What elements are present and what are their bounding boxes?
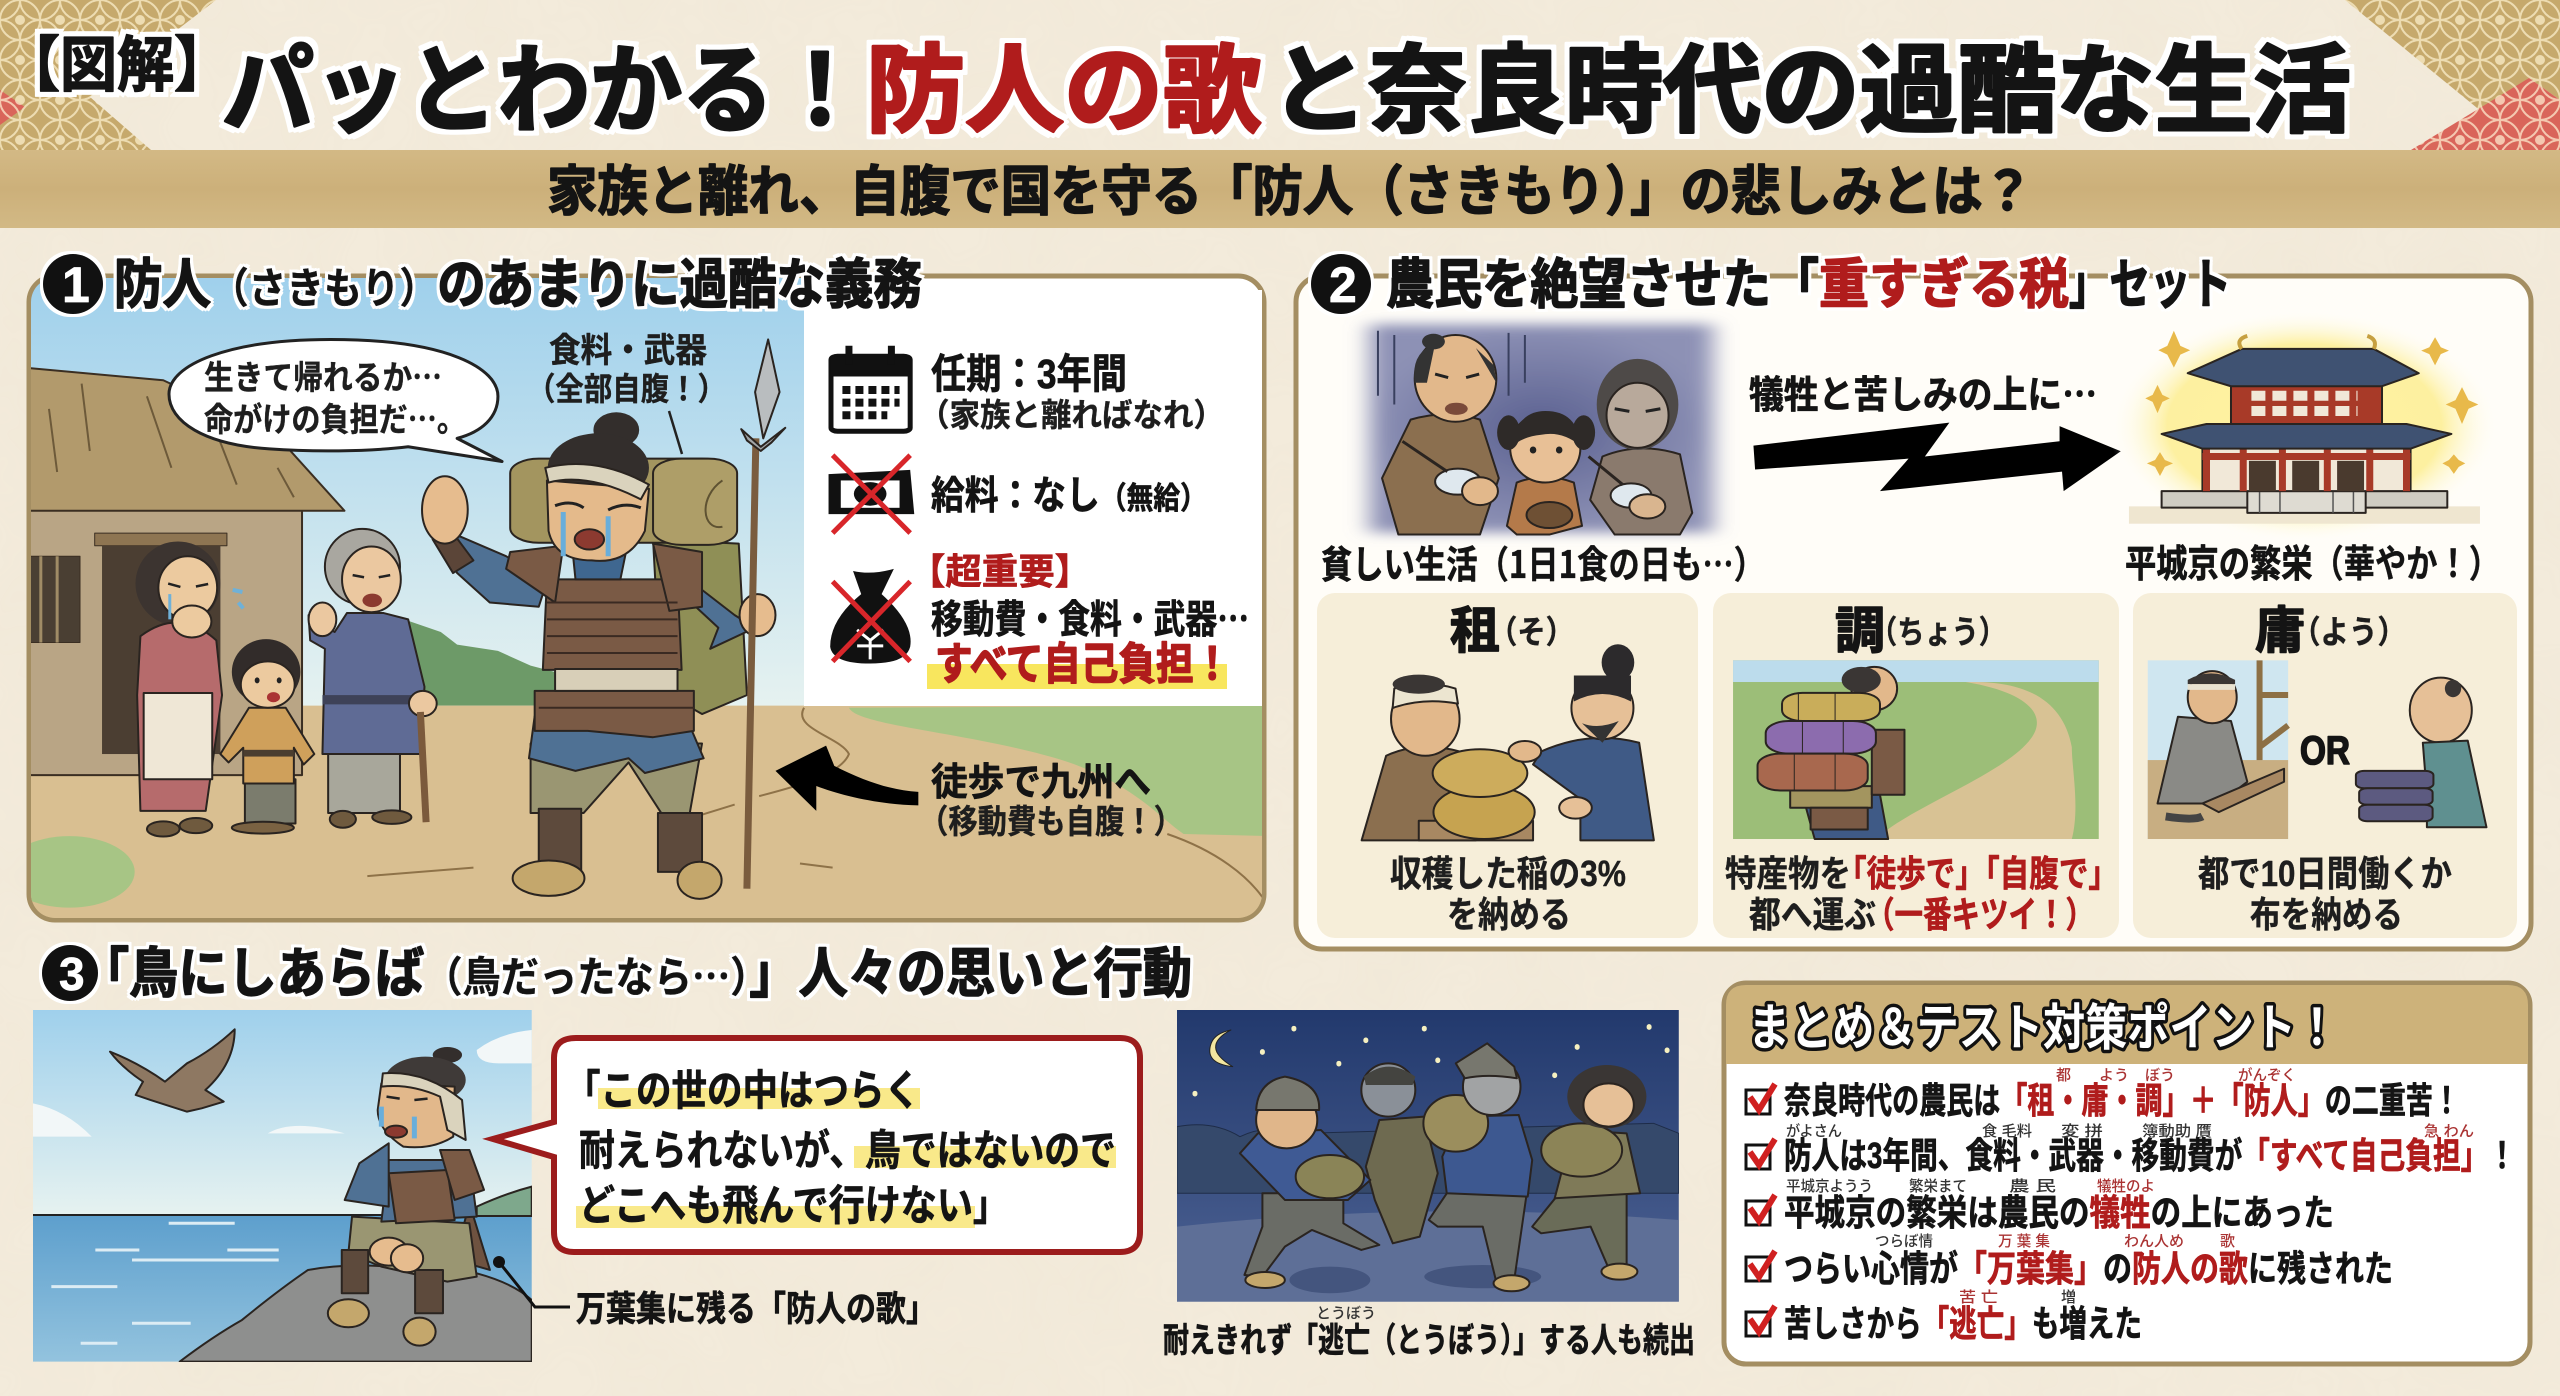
illustration: fleeing at night [1177,1010,1679,1302]
panel 1: duties of the sakimori [4,276,1273,924]
self-pay text with highlight: すべて自己負担！ [935,640,1231,689]
checklist item 3: 平城京ようう [1786,1178,1873,1195]
cho text: 都へ運ぶ [1749,894,1876,935]
child [220,639,314,834]
seated soldier [464,1218,491,1271]
cho heading: （ちょう） [1870,614,2006,650]
yo text [2198,853,2452,935]
yo heading: （よう） [2292,614,2406,650]
illustration: soldier on the rock with bird [33,1010,532,1362]
yo heading [2255,603,2406,659]
caption: poor life: 貧しい生活（1日1食の日も…） [1321,534,1765,589]
panel 2: heavy taxes [1296,276,2531,949]
title: 防人の歌 [866,38,1262,145]
runner 2 [1366,1117,1438,1243]
callout: Manyoshu [493,1256,936,1329]
heading 2: 農民を絶望させた「 [1386,255,1819,315]
white info panel [804,290,1262,706]
walking text: 徒歩で九州へ [931,762,1151,804]
illustration: Heijo-kyo palace [2109,309,2500,543]
checklist item 4: つらぼ情 [1875,1233,1933,1250]
heading 1: 1 [62,257,90,313]
self-pay text with highlight: 【超重要】 [909,551,1091,592]
icon: crossed-out money [829,455,914,533]
checklist item 2: 防人は3年間、食料・武器・移動費が「すべて自己負担」！ [1784,1135,2516,1176]
yo text: 布を納める [2250,894,2403,935]
caption: fleeing [1163,1305,1695,1360]
checklist item 3: 農 民 [2009,1178,2056,1195]
scene: farewell at the hut [4,276,1273,924]
checklist item 5: 苦 亡 [1959,1289,1998,1306]
label: food and weapons: 食料・武器 [549,332,707,370]
label: food and weapons [527,332,726,454]
checklist item 3: 平城京の繁栄は農民の犠牲の上にあった [1784,1192,2334,1233]
checklist item 2: がよさん [1786,1122,1842,1140]
heading 2: 2 [1329,257,1357,313]
heading 2: 重すぎる税 [1819,255,2069,315]
yo heading: 庸 [2255,603,2305,659]
subtitle band: 家族と離れ、自腹で国を守る「防人（さきもり）」の悲しみとは？ [547,162,2033,222]
hut [24,368,344,775]
checklist item 3: 繁栄まて [1909,1178,1967,1195]
checklist item 3: 犠牲のよ [2097,1178,2155,1195]
checklist item 4 [1746,1233,2393,1289]
caption: Heijo-kyo prosperity: 平城京の繁栄（華やか！） [2125,544,2500,586]
heading 3: 「鳥にしあらば（鳥だったなら…）」人々の思いと行動 [80,929,1192,1008]
cho heading: 調 [1835,603,1885,659]
title: 【図解】 [3,32,231,99]
checklist item 4: 歌 [2220,1233,2235,1250]
checklist item 3 [1746,1178,2334,1233]
term of service text: 任期：3年間 [931,351,1127,397]
card: yo [2133,593,2517,938]
term of service text: （家族と離ればなれ） [919,397,1224,433]
panel: summary and test points [1724,983,2530,1364]
woman [136,541,243,837]
cho text: 「徒歩で」「自腹で」 [1837,853,2118,894]
rock [180,1266,532,1362]
so text: 収穫した稲の3% [1390,853,1626,894]
self-pay text with highlight: 移動費・食料・武器… [931,589,1249,645]
illustration: labor or cloth [2148,660,2486,839]
so text [1390,853,1626,935]
checklist item 1: よう [2099,1067,2129,1084]
checklist item 4: つらい心情が「万葉集」の防人の歌に残された [1784,1248,2393,1289]
checklist item 4: わん人め [2124,1233,2184,1250]
heading 1: 防人（さきもり）のあまりに過酷な義務 [114,255,922,315]
label: food and weapons: （全部自腹！） [527,371,726,407]
runner 4 [1532,1193,1627,1268]
bird [110,1029,235,1112]
checklist item 2: 変 拼 [2061,1123,2103,1140]
label: on top of sacrifice: 犠牲と苦しみの上に… [1749,364,2097,419]
heading 2 [1311,254,2231,315]
icon: calendar [831,346,910,431]
callout: Manyoshu: 万葉集に残る「防人の歌」 [576,1290,936,1329]
checklist item 4: 万 葉 集 [1998,1233,2050,1250]
cho heading [1835,603,2006,659]
walking text [919,762,1183,840]
heading 3: 3 [59,948,85,1000]
corner pattern: top right [2345,0,2560,150]
checklist item 1: 都 [2056,1067,2071,1084]
checklist item 5 [1746,1288,2142,1344]
speech bubble: poem [493,1038,1140,1252]
speech bubble: poem: 「この世の中はつらく [565,1067,920,1114]
checklist item 2: 食 毛料 [1982,1123,2032,1140]
icon: crossed-out money bag [830,569,911,664]
caption: fleeing: 耐えきれず「逃亡（とうぼう）」する人も続出 [1163,1322,1695,1360]
title [3,32,2351,145]
grandmother [309,529,437,828]
yo text: 都で10日間働くか [2198,853,2452,894]
speech bubble [169,339,502,462]
so heading: （そ） [1489,614,1574,650]
checklist item 5: 増 [2061,1288,2076,1306]
salary text: 給料：なし（無給） [931,475,1207,518]
checklist item 1: ぼう [2145,1067,2175,1084]
cho text [1725,853,2118,935]
soldier [422,339,785,899]
self-pay text with highlight [909,551,1249,689]
so text: を納める [1447,894,1571,935]
checklist item 1: がんぞく [2238,1066,2296,1084]
illustration: carrying goods on foot [1733,660,2099,839]
walking text: （移動費も自腹！） [919,803,1183,840]
cho text: （一番キツイ！） [1866,894,2094,935]
runner 3 [1429,1187,1528,1282]
subtitle band [0,150,2560,228]
title: パッとわかる！ [222,38,866,145]
speech bubble: poem: どこへも飛んで行けない」 [579,1182,1009,1229]
summary title: まとめ＆テスト対策ポイント！ [1748,1000,2338,1056]
checklist item 1 [1746,1066,2460,1121]
checklist item 2: 簿動助 贋 [2142,1122,2212,1140]
so heading [1450,603,1574,659]
card: cho [1713,593,2119,938]
card: so [1317,593,1698,938]
checklist item 2: 急 わん [2424,1122,2474,1140]
heading 2: 」セット [2069,255,2231,315]
so heading: 租 [1450,603,1500,659]
caption: fleeing: とうぼう [1316,1305,1376,1322]
speech bubble: 生きて帰れるか… [204,351,442,399]
speech bubble: poem: 耐えられないが、鳥ではないので [579,1127,1116,1174]
or label: OR [2300,729,2350,773]
illustration: paying rice [1362,644,1654,840]
arrow: zigzag [1753,423,2121,491]
title: と奈良時代の過酷な生活 [1270,38,2351,145]
corner pattern: top left [0,0,216,150]
checklist item 2 [1746,1122,2516,1176]
cho text: 特産物を [1725,853,1851,894]
term of service text [919,351,1224,433]
checklist item 1: 奈良時代の農民は「租・庸・調」＋「防人」の二重苦！ [1784,1080,2460,1121]
runner 1 [1244,1193,1379,1277]
arrow: walking to Kyushu [775,746,918,811]
speech bubble: 命がけの負担だ…。 [204,393,466,441]
checklist item 5: 苦しさから「逃亡」も増えた [1784,1303,2142,1344]
illustration: poor family [1370,324,1713,535]
